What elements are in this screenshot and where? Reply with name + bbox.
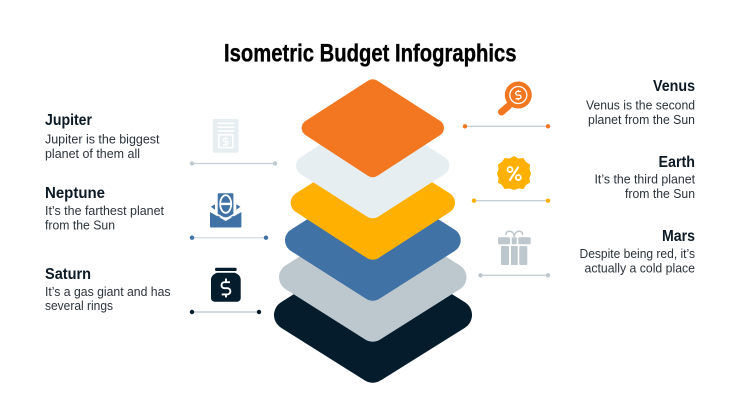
icon: money jar (211, 268, 241, 302)
isometric layer stack (289, 88, 457, 368)
layer: navy (289, 262, 457, 368)
text: Neptune description: It’s the farthest planet (45, 203, 164, 218)
text: Saturn description: It’s a gas giant and has (45, 284, 171, 299)
text: Venus description: Venus is the second (586, 98, 695, 112)
icon: magnifier with dollar (502, 82, 532, 112)
text: Earth description: from the Sun (625, 186, 695, 201)
text: Neptune description: from the Sun (45, 218, 115, 232)
icon: percent badge (497, 156, 531, 190)
heading: Venus: Venus (653, 78, 695, 95)
block: Jupiter (45, 112, 160, 161)
connector: Saturn (190, 310, 261, 314)
block: Neptune (45, 185, 164, 232)
text: Saturn description (45, 284, 171, 313)
heading: Neptune: Neptune (45, 185, 105, 202)
text: Venus description: planet from the Sun (588, 112, 695, 127)
text: Mars description: Despite being red, it’s (580, 246, 695, 261)
text: Mars description (580, 246, 695, 276)
text: Earth description (594, 172, 695, 201)
block: Venus (586, 78, 695, 127)
heading: Jupiter: Jupiter (45, 112, 92, 129)
block: Saturn (45, 266, 171, 313)
text: Jupiter description (45, 132, 160, 161)
heading: Mars: Mars (662, 228, 695, 245)
block: Earth (594, 154, 695, 201)
block: Mars (580, 228, 695, 276)
layer: grey (293, 227, 452, 328)
layer: yellow (302, 158, 444, 249)
text: Jupiter description: planet of them all (45, 146, 140, 161)
text: Jupiter description: Jupiter is the biggest (45, 132, 160, 146)
text: Saturn description: several rings (45, 298, 113, 313)
icon: gift box (498, 231, 531, 265)
text: Neptune description (45, 203, 164, 232)
text: Mars description: actually a cold place (584, 260, 695, 276)
connector: Earth (472, 198, 550, 203)
icon: envelope with money (210, 193, 241, 228)
layer: blue (298, 192, 448, 288)
text: Earth description: It’s the third planet (594, 172, 695, 186)
text: Venus description (586, 98, 695, 127)
title: Isometric Budget Infographics (224, 40, 516, 68)
icon: document with dollar (213, 119, 238, 153)
heading: Saturn: Saturn (45, 266, 91, 283)
layer: pale (306, 123, 439, 208)
connector: Jupiter (190, 161, 277, 166)
layer: orange (310, 88, 436, 169)
connector: Venus (463, 124, 550, 128)
connector: Mars (478, 273, 550, 277)
heading: Earth: Earth (658, 154, 695, 171)
connector: Neptune (190, 236, 268, 240)
